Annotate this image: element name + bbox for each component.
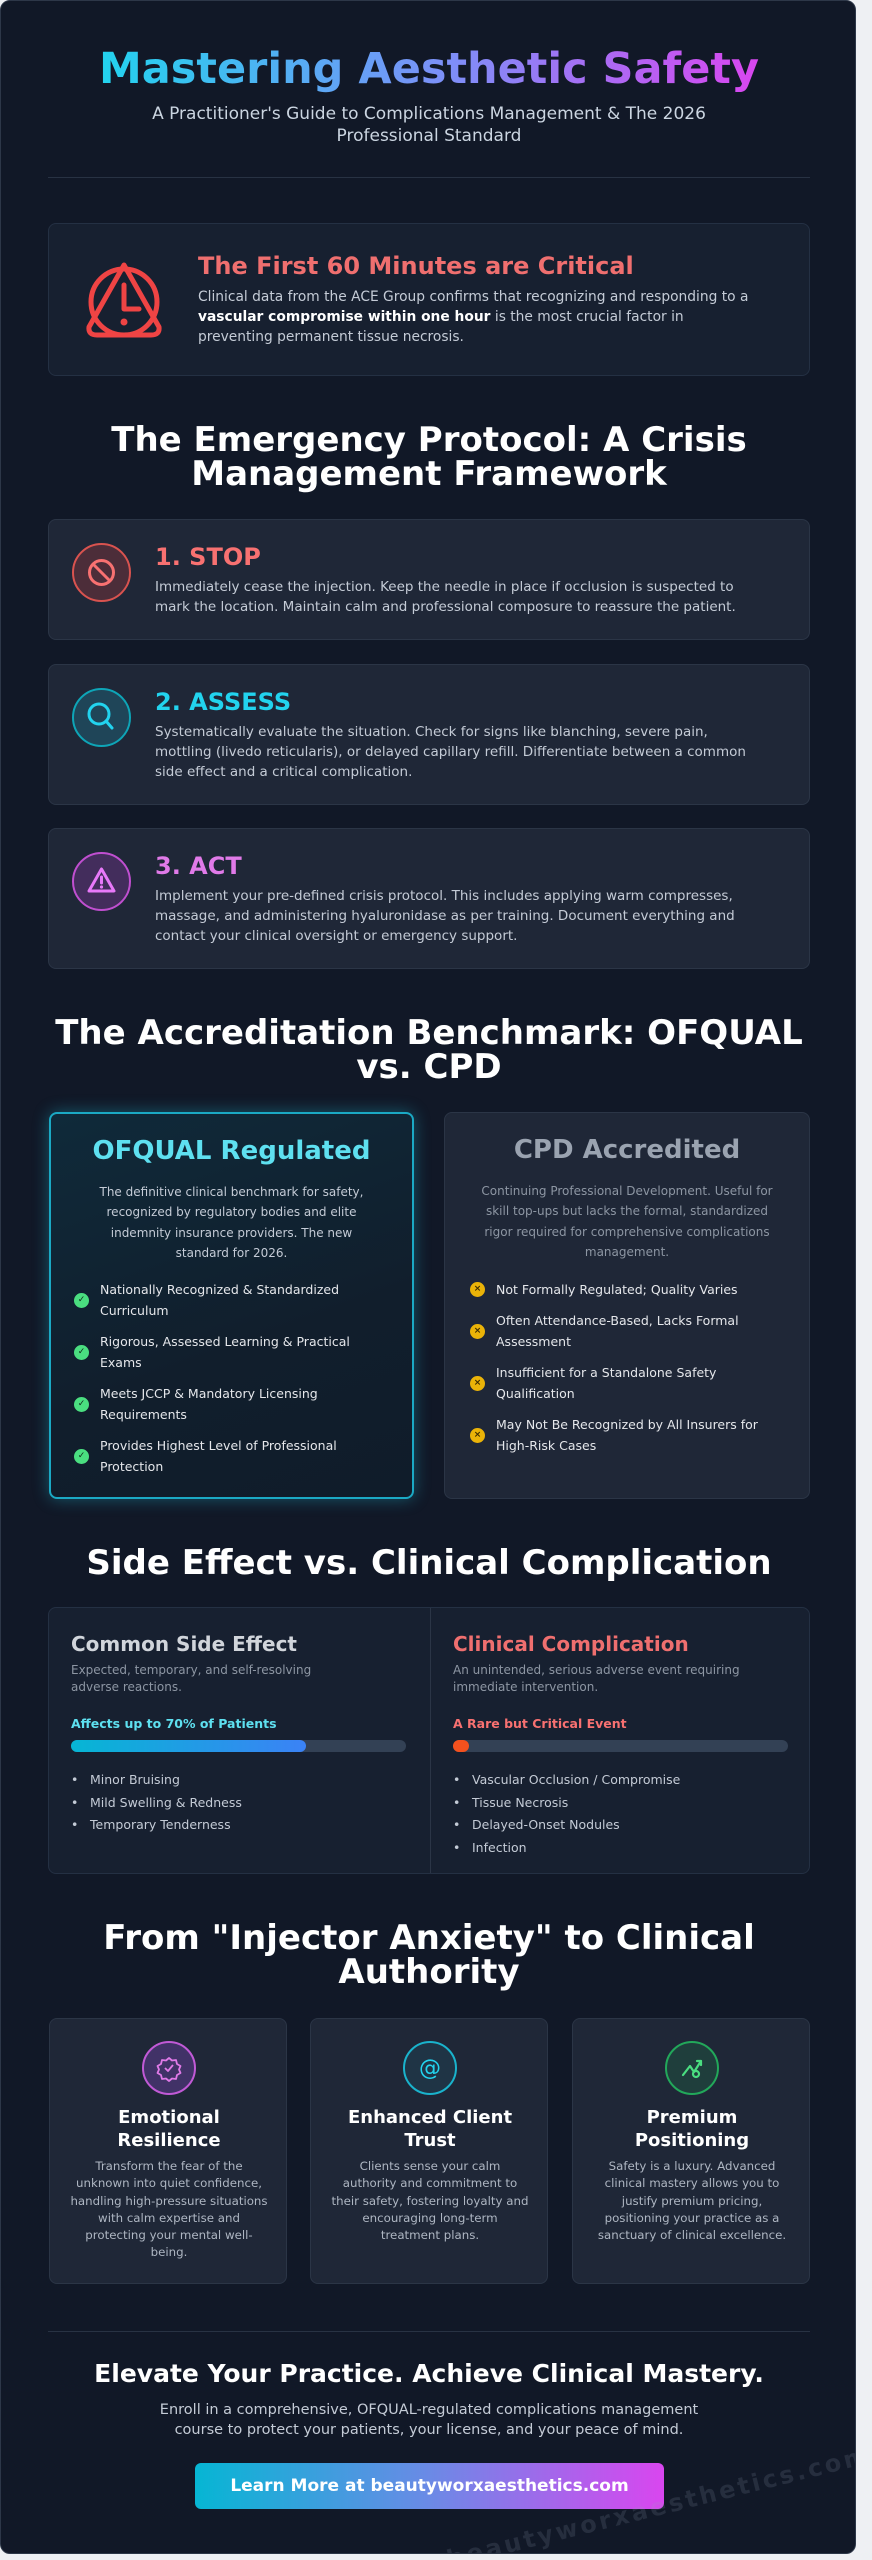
heading: The First 60 Minutes are Critical: [198, 252, 634, 280]
panel: ofqual: The definitive clinical benchmark for safety, recognized by regulatory bodies and elite indemnity insurance providers. The new standard for 2026.: [100, 1185, 363, 1260]
panel: act: [48, 828, 810, 969]
checklist: Provides Highest Level of Professional Protection: [100, 1438, 337, 1474]
panel: emotional resilience: [49, 2018, 287, 2284]
left: side effect: Affects up to 70% of Patients: [71, 1716, 277, 1731]
cta button: Learn More at beautyworxaesthetics.com: [230, 2476, 629, 2496]
heading: accreditation: The Accreditation Benchmark: OFQUAL vs. CPD: [55, 1013, 803, 1087]
checklist: ✓: [78, 1398, 85, 1408]
icon: at sign: [403, 2041, 457, 2095]
panel: assess: [48, 664, 810, 805]
text: Clinical data from the ACE Group confirms that recognizing and responding to a vascular compromise within one hour is the most crucial factor in preventing permanent tissue necrosis.: [198, 289, 748, 345]
callout: first 60 minutes: [48, 223, 810, 376]
checklist: [74, 1282, 350, 1474]
right: complication: [453, 1632, 788, 1855]
left: side effect: Expected, temporary, and self-resolving adverse reactions.: [71, 1663, 311, 1694]
x list: May Not Be Recognized by All Insurers for High-Risk Cases: [496, 1417, 758, 1453]
panel: cpd: CPD Accredited: [514, 1135, 740, 1165]
left: side effect: [71, 1632, 406, 1832]
icon: badge check: [142, 2041, 196, 2095]
subtitle: A Practitioner's Guide to Complications Management & The 2026 Professional Standard: [152, 104, 706, 146]
right: complication: Delayed-Onset Nodules: [472, 1817, 620, 1832]
panel: act: 3. ACT: [155, 852, 242, 880]
panel: premium positioning: Safety is a luxury. Advanced clinical mastery allows you to justify premium pricing, positioning your practice as a sanctuary of clinical excellence.: [598, 2159, 786, 2242]
panel: emotional resilience: Emotional Resilience: [117, 2107, 221, 2151]
icon: trend: [665, 2041, 719, 2095]
panel: emotional resilience: Transform the fear of the unknown into quiet confidence, handling high-pressure situations with calm expertise and protecting your mental well-being.: [70, 2159, 268, 2259]
left: side effect: Common Side Effect: [71, 1632, 297, 1656]
panel: stop: [48, 519, 810, 640]
panel: assess: Systematically evaluate the situation. Check for signs like blanching, severe pain, mottling (livedo reticularis), or delayed capillary refill. Differentiate between a common side effect and a critical complication.: [155, 724, 746, 780]
right: complication: A Rare but Critical Event: [453, 1716, 627, 1731]
panel: comparison: [48, 1607, 810, 1874]
x list: ×: [474, 1378, 481, 1388]
left: side effect: Minor Bruising: [90, 1772, 180, 1787]
panel: assess: 2. ASSESS: [155, 688, 291, 716]
panel: ofqual: [49, 1112, 414, 1499]
heading: emergency protocol: The Emergency Protocol: A Crisis Management Framework: [111, 420, 747, 494]
checklist: Meets JCCP & Mandatory Licensing Requirements: [100, 1386, 318, 1422]
panel: client trust: Enhanced Client Trust: [348, 2107, 512, 2151]
x list: ×: [474, 1430, 481, 1440]
icon: warning: [72, 852, 131, 911]
x list: Not Formally Regulated; Quality Varies: [496, 1282, 738, 1297]
panel: premium positioning: [572, 2018, 810, 2284]
title: Mastering Aesthetic Safety: [99, 44, 759, 94]
cta button: [195, 2463, 664, 2509]
panel: act: Implement your pre-defined crisis protocol. This includes applying warm compresses, massage, and administering hyaluronidase as per training. Document everything and contact your clinical oversight or emergency support.: [155, 888, 735, 944]
x list: Insufficient for a Standalone Safety Qualification: [496, 1365, 716, 1401]
panel: ofqual: OFQUAL Regulated: [93, 1136, 370, 1166]
panel: premium positioning: Premium Positioning: [635, 2107, 749, 2151]
right: complication: Tissue Necrosis: [472, 1795, 568, 1810]
checklist: ✓: [78, 1450, 85, 1460]
panel: client trust: [310, 2018, 548, 2284]
right: complication: Vascular Occlusion / Compromise: [472, 1772, 680, 1787]
left: side effect: Temporary Tenderness: [90, 1817, 231, 1832]
right: complication: An unintended, serious adverse event requiring immediate intervention.: [453, 1663, 740, 1694]
heading: side effect vs complication: Side Effect vs. Clinical Complication: [86, 1543, 772, 1583]
icon: stop: [72, 543, 131, 602]
bar chart: 70%: [71, 1740, 406, 1752]
panel: client trust: Clients sense your calm authority and commitment to their safety, fostering loyalty and encouraging long-term treatment plans.: [332, 2159, 528, 2242]
right: complication: Clinical Complication: [453, 1632, 689, 1656]
x list: Often Attendance-Based, Lacks Formal Assessment: [496, 1313, 739, 1349]
cta text: Enroll in a comprehensive, OFQUAL-regulated complications management course to protect your patients, your license, and your peace of mind.: [160, 2402, 698, 2438]
panel: stop: 1. STOP: [155, 543, 261, 571]
checklist: Rigorous, Assessed Learning & Practical Exams: [100, 1334, 350, 1370]
x list: ×: [474, 1284, 481, 1294]
icon: at sign: @: [419, 2056, 441, 2081]
bar chart: rare: [453, 1740, 788, 1752]
x list: ×: [474, 1326, 481, 1336]
panel: cpd: Continuing Professional Development. Useful for skill top-ups but lacks the formal, standardized rigor required for comprehensive complications management.: [481, 1184, 773, 1259]
checklist: Nationally Recognized & Standardized Curriculum: [100, 1282, 339, 1318]
left: side effect: Mild Swelling & Redness: [90, 1795, 242, 1810]
heading: authority: From "Injector Anxiety" to Clinical Authority: [103, 1918, 755, 1992]
checklist: ✓: [78, 1346, 85, 1356]
x list: [470, 1282, 758, 1453]
right: complication: Infection: [472, 1840, 527, 1855]
icon: alarm triangle: [86, 262, 162, 338]
icon: search: [72, 688, 131, 747]
panel: cpd: [444, 1112, 810, 1499]
panel: stop: Immediately cease the injection. Keep the needle in place if occlusion is suspected to mark the location. Maintain calm and professional composure to reassure the patient.: [155, 579, 736, 615]
cta heading: Elevate Your Practice. Achieve Clinical Mastery.: [94, 2359, 764, 2388]
checklist: ✓: [78, 1294, 85, 1304]
